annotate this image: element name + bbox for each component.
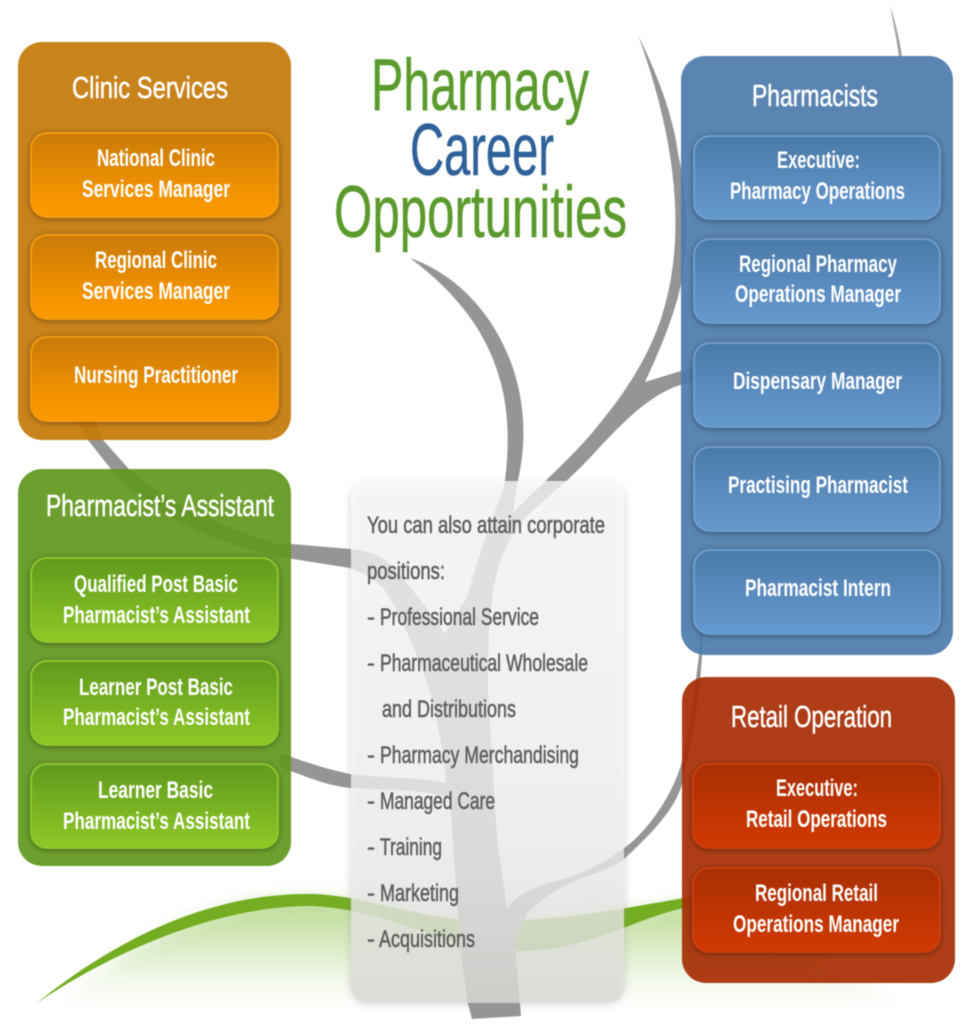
- title: Opportunities: [334, 172, 627, 253]
- corporate positions text: [367, 512, 605, 953]
- panel: pharmacist's assistant: [18, 469, 291, 866]
- button: learner basic: Learner Basic: [98, 777, 213, 804]
- button: executive retail operations: Executive:: [776, 775, 858, 802]
- button: regional retail operations manager: [693, 868, 940, 952]
- button: regional clinic services manager: [31, 235, 278, 319]
- button: practising pharmacist: [694, 447, 940, 531]
- corporate positions text: -: [367, 604, 375, 631]
- button: regional retail operations manager: Operations Manager: [733, 911, 899, 938]
- button: learner post basic: [31, 661, 278, 745]
- panel: pharmacists: [681, 56, 953, 655]
- green hill: [37, 894, 960, 1032]
- button: executive retail operations: [693, 764, 940, 848]
- button: dispensary manager: Dispensary Manager: [733, 368, 902, 395]
- button: national clinic services manager: National Clinic: [97, 145, 215, 172]
- corporate positions text: -: [367, 742, 375, 769]
- corporate positions text: You can also attain corporate: [367, 512, 605, 539]
- title: Career: [410, 110, 554, 191]
- corporate positions text: Training: [380, 834, 442, 861]
- button: learner post basic: Pharmacist’s Assistant: [63, 704, 250, 731]
- corporate positions text: and Distributions: [382, 696, 516, 723]
- button: practising pharmacist: Practising Pharmacist: [728, 472, 908, 499]
- corporate positions text: -: [367, 650, 375, 677]
- corporate positions text: Managed Care: [380, 788, 495, 815]
- button: regional pharmacy operations manager: Regional Pharmacy: [739, 251, 897, 278]
- heading: pharmacist's assistant: Pharmacist’s Assistant: [46, 488, 274, 523]
- button: qualified post basic: Qualified Post Basic: [74, 571, 238, 598]
- corporate positions text: -: [367, 926, 375, 953]
- heading: clinic services: Clinic Services: [72, 70, 228, 105]
- button: regional pharmacy operations manager: [694, 239, 940, 323]
- button: learner basic: [31, 764, 278, 848]
- button: regional pharmacy operations manager: Operations Manager: [735, 281, 901, 308]
- corporate positions text: positions:: [367, 558, 445, 585]
- button: regional clinic services manager: Services Manager: [82, 278, 230, 305]
- title: [334, 45, 627, 253]
- heading: pharmacists: Pharmacists: [752, 78, 878, 113]
- button: regional clinic services manager: Regional Clinic: [95, 247, 217, 274]
- button: pharmacist intern: [694, 550, 940, 634]
- button: regional retail operations manager: Regional Retail: [755, 880, 878, 907]
- corporate positions text: -: [367, 788, 375, 815]
- button: executive pharmacy operations: Pharmacy Operations: [730, 178, 905, 205]
- button: nursing practitioner: [31, 337, 278, 421]
- button: learner basic: Pharmacist’s Assistant: [63, 808, 250, 835]
- button: qualified post basic: [31, 558, 278, 642]
- heading: retail operation: Retail Operation: [731, 699, 892, 734]
- button: dispensary manager: [694, 343, 940, 427]
- button: executive pharmacy operations: [694, 136, 940, 219]
- button: pharmacist intern: Pharmacist Intern: [745, 575, 891, 602]
- corporate positions text: Pharmacy Merchandising: [380, 742, 579, 769]
- button: national clinic services manager: Services Manager: [82, 176, 230, 203]
- panel: retail operation: [682, 677, 955, 983]
- button: executive retail operations: Retail Operations: [746, 806, 887, 833]
- button: executive pharmacy operations: Executive:: [777, 147, 860, 174]
- corporate positions text: Pharmaceutical Wholesale: [380, 650, 588, 677]
- title: Pharmacy: [371, 45, 589, 126]
- button: qualified post basic: Pharmacist’s Assistant: [63, 602, 250, 629]
- corporate positions text: Marketing: [380, 880, 459, 907]
- panel: corporate positions: [350, 481, 625, 1004]
- button: nursing practitioner: Nursing Practitioner: [74, 362, 238, 389]
- corporate positions text: -: [367, 834, 375, 861]
- corporate positions text: Professional Service: [380, 604, 539, 631]
- corporate positions text: -: [367, 880, 375, 907]
- button: national clinic services manager: [31, 133, 278, 217]
- panel: clinic services: [18, 42, 291, 440]
- button: learner post basic: Learner Post Basic: [79, 674, 233, 701]
- corporate positions text: Acquisitions: [379, 926, 475, 953]
